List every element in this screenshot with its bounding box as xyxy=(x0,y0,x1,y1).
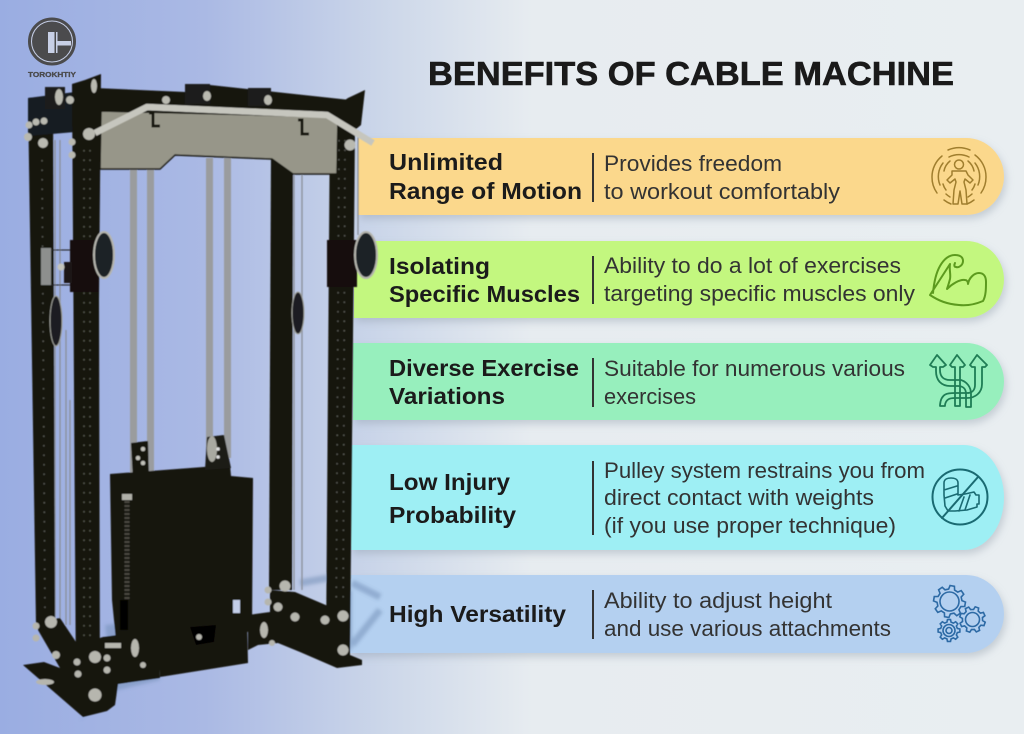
lat bar xyxy=(95,107,373,143)
rear right upright xyxy=(269,150,293,590)
heading: diverse exercise variations: Variations xyxy=(389,383,505,409)
description: targeting xyxy=(604,253,915,306)
side pulley right xyxy=(327,232,377,287)
description: pulley system: Pulley system restrains you from xyxy=(604,458,925,483)
heading: unlimited range of motion: Unlimited xyxy=(389,149,503,175)
perforations xyxy=(42,140,345,640)
rear left upright xyxy=(28,96,55,625)
heading: high versatility: High Versatility xyxy=(389,601,566,627)
description: numerous exercises xyxy=(604,356,905,409)
panel: unlimited range of motion xyxy=(358,138,1004,215)
top beam xyxy=(95,85,350,125)
bolts xyxy=(24,96,356,158)
description: freedom: Provides freedom xyxy=(604,151,782,176)
side pulley left xyxy=(41,232,114,292)
front right upright xyxy=(326,90,365,650)
selector pin column xyxy=(120,494,240,630)
floor shadow xyxy=(80,578,380,720)
panel: diverse exercise variations xyxy=(353,343,1004,420)
description: numerous exercises: exercises xyxy=(604,384,696,409)
icon: gears xyxy=(931,583,989,641)
logo wordmark: TOROKHTIY xyxy=(28,70,76,79)
cables xyxy=(55,130,358,630)
heading: isolating specific muscles: Isolating xyxy=(389,253,490,279)
panel: isolating specific muscles xyxy=(354,241,1004,318)
guide rods xyxy=(130,158,231,475)
heading: unlimited range of motion xyxy=(389,149,582,204)
description: pulley system: (if you use proper technique) xyxy=(604,513,896,538)
description: adjust height xyxy=(604,588,891,641)
base bolts xyxy=(32,580,348,702)
description: pulley system: direct contact with weights xyxy=(604,485,874,510)
gray plate xyxy=(100,111,338,174)
right base assembly xyxy=(248,590,362,668)
icon: branching arrows xyxy=(930,355,987,407)
title: BENEFITS OF CABLE MACHINE xyxy=(428,55,954,92)
stack connectors xyxy=(131,435,231,480)
heading: low injury probability: Low Injury xyxy=(389,469,510,495)
logo xyxy=(28,19,76,79)
panel: low injury probability xyxy=(351,445,1004,550)
description: pulley system xyxy=(604,458,925,538)
description: targeting: targeting specific muscles only xyxy=(604,281,915,306)
cable machine illustration xyxy=(23,74,380,720)
weight stack xyxy=(110,465,253,670)
description: numerous exercises: Suitable for numerous various xyxy=(604,356,905,381)
heading: low injury probability: Probability xyxy=(389,502,516,528)
heading: low injury probability xyxy=(389,469,516,528)
heading: diverse exercise variations xyxy=(389,355,579,409)
icon: body with motion rings xyxy=(932,148,986,204)
description: targeting: Ability to do a lot of exercises xyxy=(604,253,901,278)
bar hooks xyxy=(149,113,309,134)
heading: isolating specific muscles: Specific Muscles xyxy=(389,281,580,307)
description: adjust height: and use various attachments xyxy=(604,616,891,641)
mid pulleys xyxy=(50,292,304,346)
icon: no broken arm xyxy=(932,470,988,524)
front left upright xyxy=(72,74,101,690)
panel: high versatility xyxy=(350,575,1004,653)
heading: diverse exercise variations: Diverse Exercise xyxy=(389,355,579,381)
front stack base xyxy=(157,617,248,677)
pulleys top xyxy=(45,79,272,109)
description: freedom: to workout comfortably xyxy=(604,179,840,204)
icon: flexed bicep xyxy=(930,255,986,305)
left base assembly xyxy=(23,618,160,717)
heading: isolating specific muscles xyxy=(389,253,580,307)
heading: unlimited range of motion: Range of Motion xyxy=(389,178,582,204)
description: freedom xyxy=(604,151,840,204)
description: adjust height: Ability to adjust height xyxy=(604,588,832,613)
